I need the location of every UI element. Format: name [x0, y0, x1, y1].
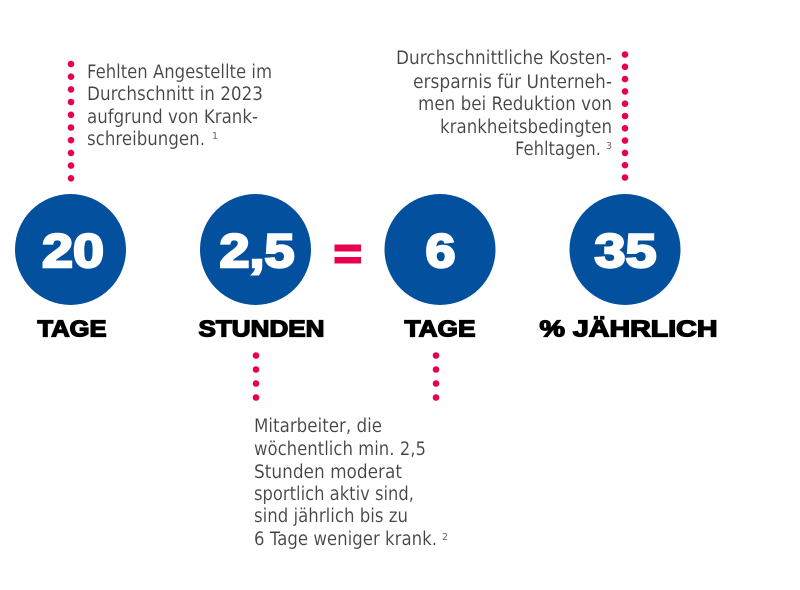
- text block: active employees: 6 Tage weniger krank.: [254, 529, 437, 550]
- dotted line: below 6: [433, 352, 439, 401]
- stat: 20 Tage: 20: [42, 224, 104, 277]
- text block: absent employees: 1: [212, 131, 218, 142]
- text block: absent employees: aufgrund von Krank-: [87, 107, 258, 128]
- stat: 2,5 Stunden: [198, 194, 324, 341]
- text block: active employees: sportlich aktiv sind,: [254, 484, 414, 505]
- text block: active employees: [254, 416, 448, 550]
- text block: cost savings: Fehltagen.: [515, 139, 601, 160]
- text block: active employees: Stunden moderat: [254, 462, 402, 483]
- text block: cost savings: men bei Reduktion von: [418, 94, 612, 115]
- text block: active employees: Mitarbeiter, die: [254, 416, 382, 437]
- text block: cost savings: ersparnis für Unterneh-: [413, 72, 612, 93]
- text block: absent employees: Durchschnitt in 2023: [87, 84, 263, 105]
- text block: absent employees: schreibungen.: [87, 129, 205, 150]
- dotted line: above 35: [622, 51, 628, 181]
- stat: 2,5 Stunden: STUNDEN: [198, 315, 324, 341]
- equals sign: [334, 244, 361, 264]
- text block: absent employees: Fehlten Angestellte im: [87, 62, 272, 83]
- dotted line: above 20: [68, 61, 74, 182]
- text block: cost savings: 3: [606, 141, 612, 152]
- dotted line: below 2,5: [253, 352, 259, 401]
- stat: 6 Tage: 6: [426, 224, 456, 277]
- stat: 20 Tage: TAGE: [38, 315, 106, 341]
- stat: 6 Tage: [384, 194, 496, 341]
- text block: active employees: sind jährlich bis zu: [254, 506, 408, 527]
- stat: 2,5 Stunden: 2,5: [220, 224, 294, 277]
- stat: 35 % jährlich: 35: [594, 224, 656, 277]
- stat: 6 Tage: TAGE: [404, 315, 476, 341]
- text block: cost savings: krankheitsbedingten: [440, 117, 612, 138]
- text block: cost savings: [396, 48, 612, 160]
- stat: 35 % jährlich: [540, 194, 718, 341]
- stat: 20 Tage: [15, 194, 126, 341]
- text block: active employees: wöchentlich min. 2,5: [254, 439, 426, 460]
- text block: absent employees: [87, 62, 272, 150]
- stat: 35 % jährlich: % JÄHRLICH: [540, 315, 718, 341]
- text block: active employees: 2: [442, 532, 448, 543]
- text block: cost savings: Durchschnittliche Kosten-: [396, 48, 612, 69]
